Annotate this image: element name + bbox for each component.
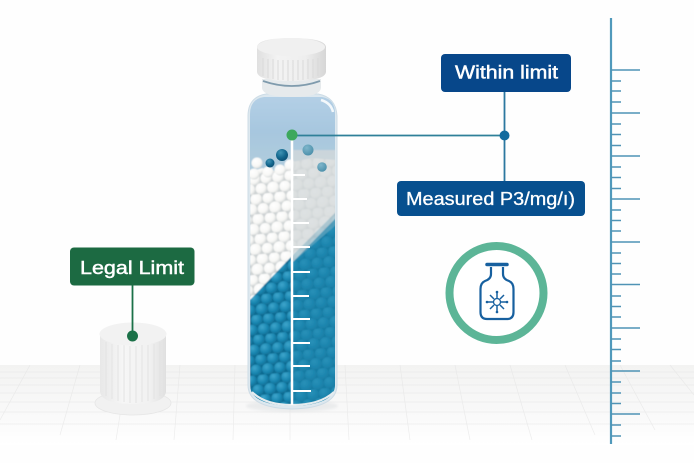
bottle shadow <box>246 400 338 412</box>
marker: junction dot <box>500 130 510 140</box>
marker: legal limit dot <box>127 330 138 342</box>
neck <box>262 79 321 97</box>
bottle <box>246 38 340 412</box>
label: legal limit: Legal Limit <box>80 257 184 278</box>
icon: bottle in ring <box>450 246 544 340</box>
glass body <box>248 94 337 409</box>
ruler scale <box>611 18 640 444</box>
contents <box>250 97 335 406</box>
floating spheres <box>266 144 327 172</box>
measuring scale on bottle <box>292 135 311 405</box>
cap <box>257 38 326 81</box>
glass highlight <box>321 100 333 112</box>
blue spheres <box>250 212 336 410</box>
floor grid <box>0 365 694 445</box>
reference cylinder <box>95 322 171 415</box>
connector lines <box>292 92 504 182</box>
connector: legal limit <box>132 285 134 336</box>
marker: green dot <box>286 130 298 140</box>
label: measured: Measured P3/mg/ı) <box>406 189 575 209</box>
label: within limit <box>441 54 571 92</box>
white spheres <box>248 158 336 310</box>
label: within limit: Within limit <box>455 62 558 82</box>
label: legal limit <box>70 248 194 286</box>
haze right of centre <box>293 150 336 262</box>
label: measured <box>397 181 585 216</box>
